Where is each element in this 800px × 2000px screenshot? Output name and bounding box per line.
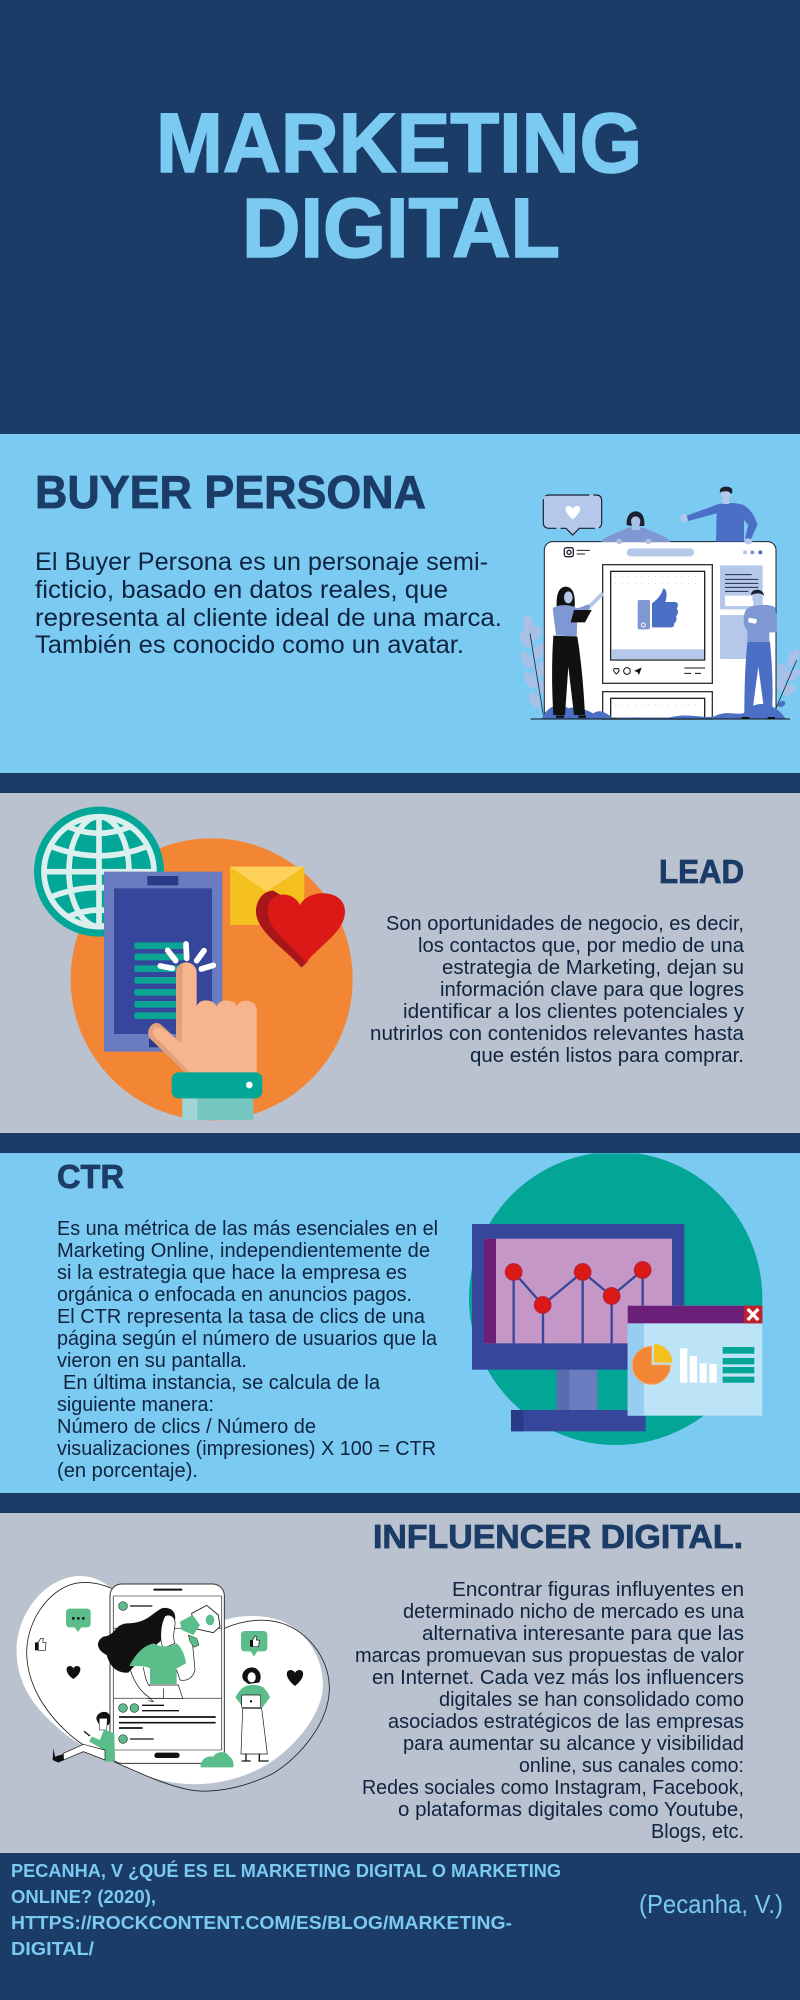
icon: pie chart — [632, 1344, 672, 1384]
person: woman with tablet — [552, 587, 604, 717]
icon: envelope — [230, 867, 304, 925]
text block: buyer persona — [35, 548, 502, 659]
text block: ctr: (en porcentaje). — [57, 1459, 198, 1482]
text block: influencer digital: online, sus canales como: — [519, 1754, 744, 1777]
text block: buyer persona: El Buyer Persona es un personaje semi- — [35, 548, 488, 576]
text block: lead: identificar a los clientes potenciales y — [403, 1000, 745, 1023]
reference text: ONLINE? (2020), — [11, 1887, 156, 1907]
title: DIGITAL — [242, 181, 560, 275]
text block: buyer persona: representa al cliente ideal de una marca. — [35, 604, 502, 632]
text block: influencer digital: o plataformas digitales como Youtube, — [398, 1798, 744, 1821]
line chart — [505, 1262, 651, 1343]
icon: chat bubble — [66, 1609, 91, 1632]
person: woman with megaphone — [98, 1608, 195, 1702]
text block: influencer digital: asociados estratégicos de las empresas — [388, 1710, 744, 1733]
browser window — [544, 542, 776, 719]
text block: ctr: siguiente manera: — [57, 1393, 214, 1416]
icon: globe — [34, 807, 164, 937]
panel: lead — [0, 793, 800, 1133]
text block: ctr: En última instancia, se calcula de la — [63, 1371, 381, 1394]
panel: ctr — [0, 1153, 800, 1493]
title — [156, 96, 642, 275]
speech bubble with heart — [543, 495, 602, 535]
header panel — [0, 0, 800, 434]
text block: lead: información clave para que logres — [440, 978, 744, 1001]
bars — [680, 1348, 717, 1383]
icon: tablet — [104, 872, 222, 1052]
icon: close button — [744, 1306, 762, 1323]
text block: influencer digital: marcas promuevan sus propuestas de valor — [355, 1644, 744, 1667]
illustration: social media team — [517, 487, 800, 719]
illustration: influencer on phone — [17, 1576, 329, 1791]
reference text: DIGITAL/ — [11, 1939, 94, 1959]
person: man with device — [742, 590, 777, 718]
text block: influencer digital: Encontrar figuras influyentes en — [452, 1578, 744, 1601]
text block: influencer digital: alternativa interesante para que las — [422, 1622, 744, 1645]
reference text: PECANHA, V ¿QUÉ ES EL MARKETING DIGITAL O MARKETING — [11, 1860, 561, 1881]
icon: tapping hand — [148, 944, 257, 1072]
icon: heart left — [67, 1666, 80, 1679]
text block: lead: Son oportunidades de negocio, es decir, — [386, 912, 744, 935]
icon: right plant — [774, 647, 800, 708]
text block: ctr: Número de clics / Número de — [57, 1415, 316, 1438]
heading: buyer persona: BUYER PERSONA — [35, 466, 426, 518]
text block: influencer digital: determinado nicho de mercado es una — [403, 1600, 745, 1623]
post card with like — [603, 565, 712, 683]
person: man sitting with phone — [53, 1712, 115, 1763]
icon: heart — [256, 891, 345, 968]
table rows — [723, 1347, 754, 1383]
white blob — [17, 1576, 329, 1791]
analytics window — [628, 1306, 762, 1416]
text block: influencer digital — [355, 1578, 745, 1843]
text block: lead: que estén listos para comprar. — [470, 1044, 744, 1067]
sidebar panels — [720, 565, 763, 659]
icon: thumbs up — [638, 588, 678, 629]
text block: buyer persona: ficticio, basado en datos reales, que — [35, 576, 448, 604]
text block: ctr: Marketing Online, independientemente de — [57, 1239, 430, 1262]
monitor stand — [511, 1370, 646, 1431]
reference text: HTTPS://ROCKCONTENT.COM/ES/BLOG/MARKETING- — [11, 1913, 512, 1933]
teal circle — [469, 1153, 762, 1445]
icon: like bubble — [241, 1631, 267, 1657]
text block: influencer digital: para aumentar su alcance y visibilidad — [403, 1732, 744, 1755]
reference text — [11, 1860, 561, 1959]
icon: left plant — [517, 614, 548, 715]
footer panel — [0, 1853, 800, 2000]
icon: cloud — [201, 1752, 234, 1767]
person: woman peeking — [602, 511, 670, 544]
monitor — [472, 1224, 684, 1370]
second post card — [603, 692, 712, 719]
person: man pointing — [681, 487, 757, 544]
heading: ctr: CTR — [57, 1158, 124, 1195]
text block: influencer digital: Blogs, etc. — [651, 1820, 744, 1843]
panel: buyer persona — [0, 434, 800, 773]
mounds and ground — [531, 704, 790, 719]
illustration: tablet with tapping hand — [34, 807, 353, 1120]
text block: lead: estrategia de Marketing, dejan su — [442, 956, 744, 979]
icon: heart right — [287, 1670, 303, 1686]
wristband — [172, 1072, 262, 1120]
text block: ctr: orgánica o enfocada en anuncios pagos. — [57, 1283, 412, 1306]
heading: lead: LEAD — [659, 853, 744, 890]
text block: influencer digital: digitales se han consolidado como — [439, 1688, 744, 1711]
text block: lead: los contactos que, por medio de una — [418, 934, 745, 957]
text block: ctr: si la estrategia que hace la empresa es — [57, 1261, 407, 1284]
title: MARKETING — [156, 96, 642, 190]
text block: ctr: visualizaciones (impresiones) X 100 = CTR — [57, 1437, 436, 1460]
text block: ctr: página según el número de usuarios que la — [57, 1327, 438, 1350]
icon: megaphone — [180, 1605, 220, 1647]
text block: ctr — [57, 1217, 438, 1482]
illustration: monitor with analytics — [469, 1153, 762, 1445]
text block: ctr: El CTR representa la tasa de clics de una — [57, 1305, 426, 1328]
citation: (Pecanha, V.) — [639, 1889, 783, 1919]
heading: influencer digital: INFLUENCER DIGITAL. — [373, 1518, 743, 1555]
person: woman with laptop — [235, 1667, 270, 1761]
text block: ctr: vieron en su pantalla. — [57, 1349, 247, 1372]
text block: influencer digital: Redes sociales como Instagram, Facebook, — [362, 1776, 744, 1799]
icon: thumb small — [35, 1638, 46, 1650]
text block: buyer persona: También es conocido como un avatar. — [35, 631, 464, 659]
orange circle — [71, 838, 353, 1120]
phone — [110, 1584, 224, 1763]
text block: lead: nutrirlos con contenidos relevantes hasta — [370, 1022, 745, 1045]
text block: influencer digital: en Internet. Cada vez más los influencers — [372, 1666, 744, 1689]
text block: ctr: Es una métrica de las más esenciales en el — [57, 1217, 438, 1240]
panel: influencer digital — [0, 1513, 800, 1853]
text block: lead — [370, 912, 745, 1067]
